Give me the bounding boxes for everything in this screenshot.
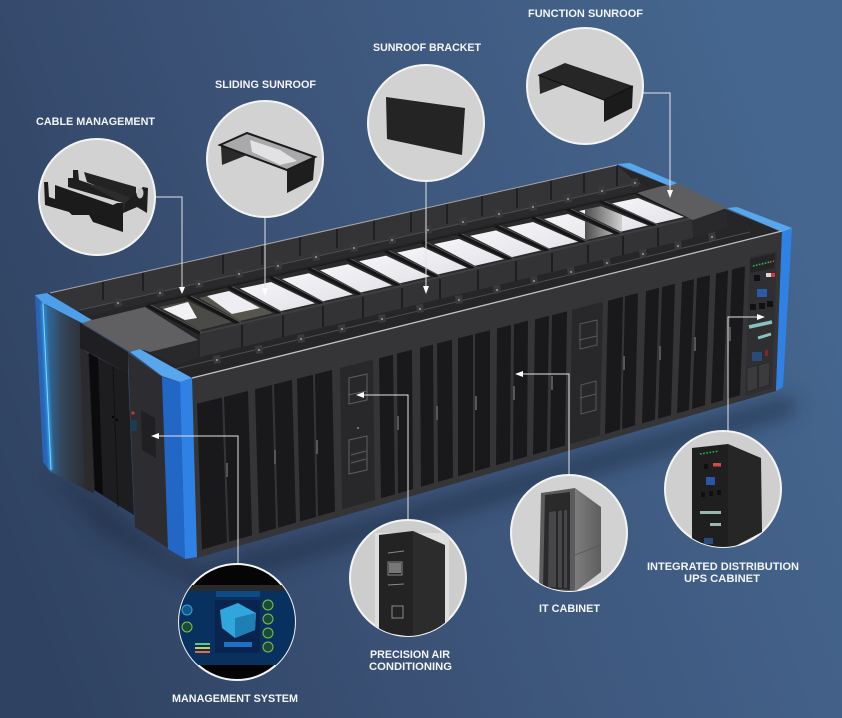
sunroof strip — [147, 193, 692, 333]
connector: management system — [154, 436, 238, 564]
right roof cover — [637, 183, 727, 238]
connector: IT cabinet — [518, 374, 569, 475]
front left blue corner — [130, 349, 197, 559]
right status dials — [263, 600, 273, 610]
icon: bracket plate — [386, 97, 465, 155]
circle: sunroof bracket — [368, 65, 484, 181]
front rail with brackets — [175, 231, 765, 378]
vent grille — [747, 362, 770, 392]
label: PRECISION AIR — [370, 649, 450, 661]
circle: cable management — [39, 139, 155, 255]
left roof cover — [82, 307, 198, 365]
connector: sliding sunroof — [264, 218, 266, 294]
sunroof frame bars — [147, 193, 692, 333]
middle plate — [68, 170, 123, 203]
door pillar — [128, 353, 168, 548]
arrow — [356, 392, 364, 398]
label: SLIDING SUNROOF — [215, 79, 316, 91]
right U bracket — [123, 187, 148, 213]
callout: precision air conditioning — [350, 392, 466, 673]
entry door — [88, 353, 134, 515]
access control — [131, 411, 135, 415]
back edge highlight — [50, 165, 617, 293]
left blue strip — [35, 293, 92, 472]
arrow — [515, 371, 523, 377]
label: MANAGEMENT SYSTEM — [172, 693, 298, 705]
icon: function sunroof cover — [538, 63, 633, 122]
icon: UPS cabinet — [692, 444, 762, 550]
callout: cable management — [36, 116, 185, 294]
rack doors — [197, 266, 745, 550]
callout: IT cabinet — [511, 371, 627, 615]
circle: UPS cabinet — [665, 431, 781, 547]
right blue corner — [617, 163, 792, 391]
label: INTEGRATED DISTRIBUTION — [647, 561, 799, 573]
connector: cable management — [155, 197, 182, 292]
icon: cable management trough — [44, 170, 148, 232]
arrow — [151, 433, 159, 439]
arrow — [262, 288, 268, 296]
glass pane 1 — [159, 301, 232, 330]
left status dials — [182, 605, 192, 615]
precision air conditioning unit front 1 — [340, 360, 375, 509]
white panes — [240, 198, 684, 311]
roof interior — [35, 165, 782, 378]
label: FUNCTION SUNROOF — [528, 8, 643, 20]
circle: precision air conditioning — [350, 520, 466, 636]
callout: integrated distribution UPS cabinet — [647, 314, 799, 585]
legend bars — [195, 643, 210, 645]
integrated distribution panel — [745, 251, 777, 397]
3D cube — [220, 603, 256, 638]
precision air conditioning unit front 2 — [570, 302, 603, 444]
icon: air conditioning cabinet — [375, 531, 449, 640]
callout: function sunroof — [527, 8, 673, 198]
label: CABLE MANAGEMENT — [36, 116, 155, 128]
front inner panels — [200, 218, 693, 357]
callout: management system — [151, 433, 298, 705]
label: UPS CABINET — [684, 573, 760, 585]
gray glass reflection — [585, 206, 622, 240]
door handles — [227, 327, 730, 477]
circle: sliding sunroof — [207, 101, 323, 217]
connector: sunroof bracket — [425, 181, 427, 292]
header above door — [80, 323, 128, 373]
status LEDs — [753, 262, 770, 266]
connector: UPS cabinet — [728, 317, 762, 431]
left end face — [45, 305, 168, 548]
circle: function sunroof — [527, 28, 643, 144]
circle: IT cabinet — [511, 475, 627, 591]
back plate — [84, 172, 136, 202]
modular data center building — [35, 163, 792, 559]
arrow — [423, 286, 429, 294]
floor shadow — [45, 396, 800, 590]
back rail with brackets — [80, 178, 650, 316]
back wall panels — [50, 165, 640, 313]
circle: management system — [179, 564, 295, 680]
switches and meters — [754, 275, 760, 281]
arrow — [179, 287, 185, 294]
callout: sunroof bracket — [368, 42, 484, 294]
arrow — [757, 314, 765, 320]
floor — [87, 184, 137, 213]
icon: sliding sunroof frame — [220, 133, 315, 193]
label: SUNROOF BRACKET — [373, 42, 481, 54]
screen: management dashboard — [178, 585, 296, 665]
front wall — [192, 231, 782, 558]
glass pane 2 — [199, 291, 273, 321]
connector: function sunroof — [642, 93, 670, 196]
callout: sliding sunroof — [207, 79, 323, 296]
touch screen — [141, 410, 156, 458]
label: CONDITIONING — [369, 661, 452, 673]
front plate with left U bracket — [44, 182, 123, 232]
connector: precision air conditioning — [359, 395, 408, 520]
arrow — [667, 190, 673, 198]
front wall top edge — [192, 231, 782, 378]
label: IT CABINET — [539, 603, 600, 615]
icon: IT cabinet — [539, 488, 601, 592]
